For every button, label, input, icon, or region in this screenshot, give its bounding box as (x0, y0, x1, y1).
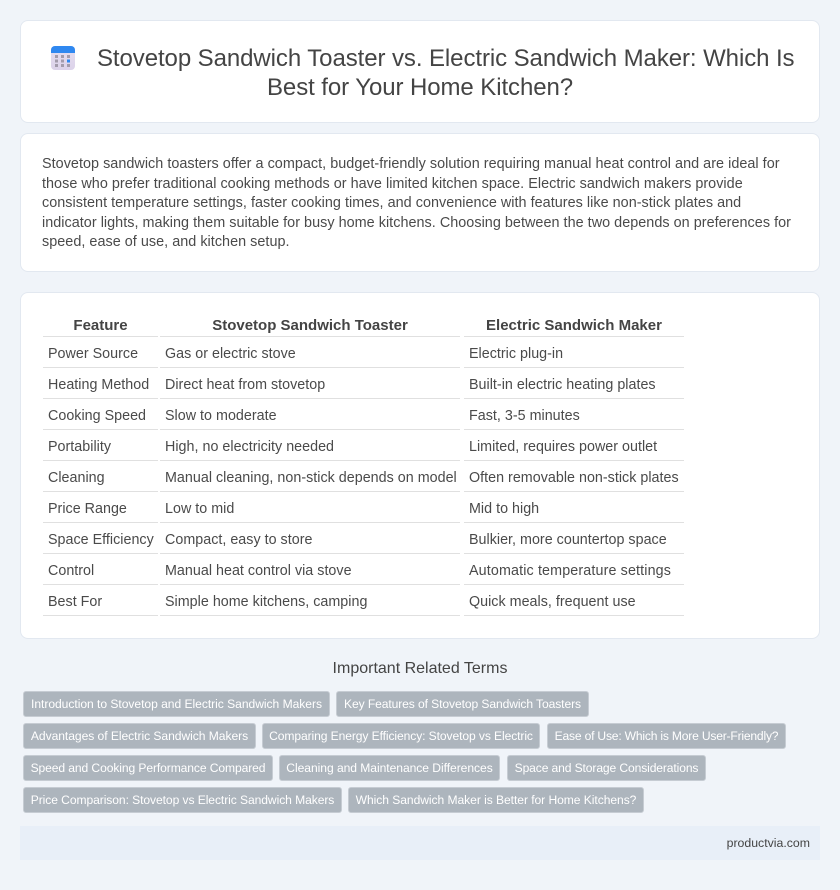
tag list: related terms: Advantages of Electric Sandwich Makers (31, 729, 248, 743)
table: comparison: Slow to moderate (165, 408, 277, 424)
table: comparison: Manual cleaning, non-stick depends on model (165, 470, 457, 486)
tag list: related terms: Key Features of Stovetop Sandwich Toasters (344, 697, 581, 711)
table: comparison: Manual heat control via stove (165, 563, 352, 579)
table: comparison: High, no electricity needed (165, 439, 334, 455)
panel: title card (20, 20, 820, 123)
table: comparison: Direct heat from stovetop (165, 377, 325, 393)
table: comparison: Feature (73, 317, 128, 334)
title: Stovetop Sandwich Toaster vs. Electric Sandwich Maker: Which Is (97, 45, 794, 72)
table: comparison: Cooking Speed (48, 408, 146, 424)
table: comparison: Automatic temperature settings (469, 563, 671, 579)
table: comparison: Fast, 3-5 minutes (469, 408, 580, 424)
table: comparison: Bulkier, more countertop space (469, 532, 667, 548)
tag list: related terms: Speed and Cooking Performance Compared (31, 761, 265, 775)
table: comparison: Built-in electric heating plates (469, 377, 656, 393)
table: comparison: Control (48, 563, 94, 579)
text block: introduction (42, 156, 791, 250)
panel: introduction (20, 133, 820, 272)
table: comparison: Mid to high (469, 501, 539, 517)
table: comparison: Power Source (48, 346, 138, 362)
table: comparison: Low to mid (165, 501, 234, 517)
text block: introduction: indicator lights, making them suitable for busy home kitchens. Choosing between the two depends on preferences for (42, 214, 791, 230)
table: comparison: Often removable non-stick plates (469, 470, 679, 486)
tag list: related terms: Introduction to Stovetop and Electric Sandwich Makers (31, 697, 322, 711)
table: comparison: Electric Sandwich Maker (486, 317, 662, 334)
table: comparison: Portability (48, 439, 111, 455)
table: comparison: Simple home kitchens, camping (165, 594, 367, 610)
panel: comparison table (20, 292, 820, 639)
tag list: related terms: Ease of Use: Which is More User-Friendly? (555, 729, 778, 743)
table: comparison: Limited, requires power outlet (469, 439, 657, 455)
tag list: related terms: Which Sandwich Maker is Better for Home Kitchens? (356, 793, 636, 807)
table: comparison (43, 317, 684, 616)
heading: related terms: Important Related Terms (333, 660, 507, 677)
table: comparison: Heating Method (48, 377, 149, 393)
icon: calendar grid (51, 46, 75, 70)
text block: introduction: those who prefer traditional cooking methods or have limited kitchen space. Electric sandwich makers provide (42, 176, 743, 192)
tag list: related terms: Price Comparison: Stovetop vs Electric Sandwich Makers (31, 793, 334, 807)
title (97, 45, 794, 101)
text block: introduction: consistent temperature settings, faster cooking times, and convenience with features like non-stick plates and (42, 195, 741, 211)
tag list: related terms: Comparing Energy Efficiency: Stovetop vs Electric (269, 729, 533, 743)
table: comparison: Price Range (48, 501, 127, 517)
table: comparison: Stovetop Sandwich Toaster (212, 317, 408, 334)
text block: introduction: Stovetop sandwich toasters offer a compact, budget-friendly solution requiring manual heat control and are ideal for (42, 156, 780, 172)
tag list: related terms: Cleaning and Maintenance Differences (286, 761, 493, 775)
table: comparison: Space Efficiency (48, 532, 154, 548)
table: comparison: Compact, easy to store (165, 532, 312, 548)
tag list: related terms: Space and Storage Considerations (515, 761, 698, 775)
title: Best for Your Home Kitchen? (267, 74, 573, 101)
table: comparison: Quick meals, frequent use (469, 594, 636, 610)
table: comparison: Electric plug-in (469, 346, 563, 362)
footer bar (20, 826, 820, 860)
table: comparison: Gas or electric stove (165, 346, 296, 362)
table: comparison: Best For (48, 594, 102, 610)
table: comparison: Cleaning (48, 470, 105, 486)
footer source text: productvia.com (727, 836, 810, 850)
text block: introduction: speed, ease of use, and kitchen setup. (42, 234, 290, 250)
tag list: related terms (23, 691, 786, 813)
